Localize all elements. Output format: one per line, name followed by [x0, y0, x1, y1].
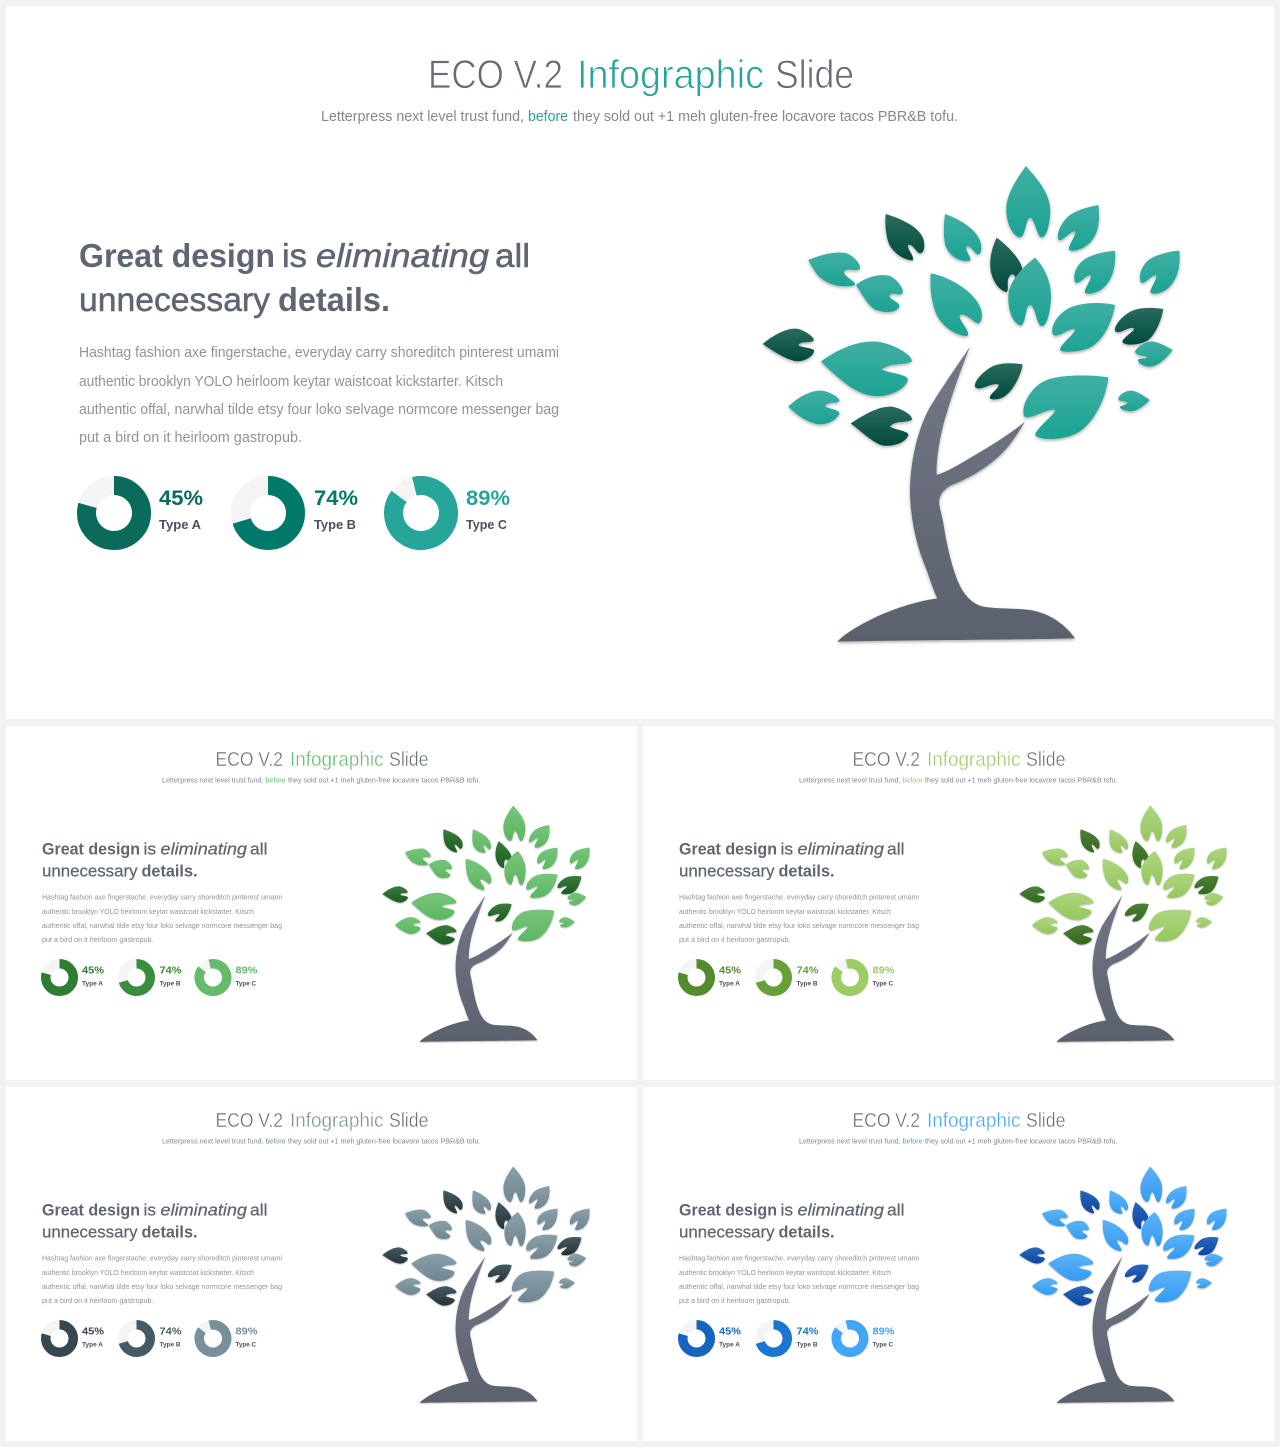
heading: all	[250, 1202, 268, 1220]
heading	[42, 1202, 268, 1242]
heading: eliminating	[160, 1202, 248, 1220]
donut: Type C 89%: Type C	[236, 980, 256, 988]
title: Infographic	[927, 1110, 1020, 1132]
heading: details.	[278, 281, 390, 318]
title: Slide	[1026, 749, 1066, 771]
leaf: branch large	[1023, 375, 1108, 439]
leaf: left second	[856, 275, 903, 312]
body paragraph	[679, 1254, 919, 1305]
subtitle: before	[528, 109, 568, 125]
body paragraph: authentic brooklyn YOLO heirloom keytar waistcoat kickstarter. Kitsch	[79, 374, 503, 390]
heading: is	[144, 1202, 156, 1220]
donut: Type C 89%	[196, 1322, 258, 1355]
title: Infographic	[927, 749, 1020, 771]
donut: Type C 89%: Type C	[872, 1342, 893, 1348]
subtitle: Letterpress next level trust fund,	[162, 776, 264, 784]
title: Slide	[1026, 1110, 1066, 1132]
leaf: far left dark	[763, 329, 814, 361]
subtitle	[321, 109, 958, 125]
title	[852, 1110, 1066, 1132]
donut: Type A 45%: 45%	[82, 964, 105, 976]
heading: details.	[778, 1224, 834, 1242]
heading: eliminating	[798, 1202, 885, 1220]
donut: Type C 89%: 89%	[872, 1326, 895, 1338]
body paragraph: Hashtag fashion axe fingerstache, everyday carry shoreditch pinterest umami	[679, 892, 919, 902]
body paragraph: authentic offal, narwhal tilde etsy four loko selvage normcore messenger bag	[42, 1282, 282, 1291]
body paragraph: authentic brooklyn YOLO heirloom keytar waistcoat kickstarter. Kitsch	[679, 907, 891, 916]
heading: unnecessary	[42, 862, 138, 880]
donut: Type A 45%: Type A	[719, 1342, 740, 1348]
body paragraph: Hashtag fashion axe fingerstache, everyday carry shoreditch pinterest umami	[79, 345, 559, 361]
body paragraph: put a bird on it heirloom gastropub.	[79, 430, 302, 446]
tree illustration: blue	[1019, 1167, 1227, 1403]
leaf: top	[1006, 166, 1050, 237]
body paragraph: authentic offal, narwhal tilde etsy four loko selvage normcore messenger bag	[679, 1282, 919, 1291]
donut: Type B 74%: 74%	[160, 964, 182, 976]
body paragraph	[79, 345, 559, 446]
donut: Type A 45%: Type A	[82, 980, 103, 988]
title: Slide	[389, 749, 428, 771]
leaf: left upper	[808, 253, 860, 286]
leaf: lower left dark	[851, 407, 912, 446]
title	[216, 1110, 428, 1132]
body paragraph: Hashtag fashion axe fingerstache, everyday carry shoreditch pinterest umami	[42, 892, 282, 902]
title: Infographic	[290, 1110, 384, 1132]
donut: Type B 74%	[760, 964, 819, 991]
heading	[679, 840, 904, 880]
donut: Type B 74%: 74%	[160, 1326, 182, 1338]
body paragraph: put a bird on it heirloom gastropub.	[42, 1296, 154, 1305]
donut: Type A 45%	[683, 964, 742, 991]
leaf: upper left dark	[885, 214, 924, 260]
leaf: upper middle	[944, 214, 981, 261]
leaf: far right	[1140, 251, 1180, 294]
heading: Great design	[679, 1202, 777, 1220]
heading: is	[144, 840, 156, 858]
subtitle: before	[266, 776, 286, 784]
subtitle	[799, 1136, 1118, 1146]
body paragraph: authentic offal, narwhal tilde etsy four loko selvage normcore messenger bag	[42, 921, 282, 930]
subtitle: they sold out +1 meh gluten-free locavore tacos PBR&B tofu.	[288, 1136, 480, 1146]
donut: Type A 45%	[683, 1325, 742, 1352]
subtitle: Letterpress next level trust fund,	[799, 776, 900, 784]
donut: Type C 89%: Type C	[236, 1342, 256, 1348]
donut: Type A 45%: 45%	[719, 964, 742, 976]
body paragraph	[42, 1254, 282, 1305]
heading	[79, 237, 530, 318]
donut: Type C 89%	[833, 1322, 895, 1355]
heading: unnecessary	[79, 281, 271, 318]
heading: unnecessary	[42, 1224, 138, 1242]
heading: details.	[778, 862, 834, 880]
body paragraph	[42, 892, 282, 944]
tree illustration	[763, 166, 1180, 642]
title: ECO V.2	[852, 749, 920, 771]
body paragraph: authentic brooklyn YOLO heirloom keytar waistcoat kickstarter. Kitsch	[42, 1268, 254, 1277]
body paragraph: put a bird on it heirloom gastropub.	[679, 935, 790, 944]
donut: Type C 89%: 89%	[236, 1326, 258, 1338]
subtitle: Letterpress next level trust fund,	[799, 1136, 900, 1146]
leaf: right middle	[1052, 303, 1115, 352]
body paragraph: authentic brooklyn YOLO heirloom keytar waistcoat kickstarter. Kitsch	[42, 907, 254, 916]
title	[852, 749, 1066, 771]
heading: eliminating	[798, 840, 885, 858]
donut: Type A 45%	[46, 964, 105, 991]
panel: green slide	[6, 726, 637, 1080]
panel: lime slide	[643, 726, 1274, 1080]
title: ECO V.2	[852, 1110, 920, 1132]
body paragraph: authentic brooklyn YOLO heirloom keytar waistcoat kickstarter. Kitsch	[679, 1268, 891, 1277]
leaf: lower left	[788, 391, 840, 424]
heading: Great design	[79, 237, 275, 274]
subtitle: they sold out +1 meh gluten-free locavore tacos PBR&B tofu.	[288, 776, 480, 784]
leaf: centre dark	[990, 238, 1022, 292]
donut: Type B 74%	[123, 1325, 182, 1352]
heading: all	[887, 1202, 904, 1220]
donut: Type C 89%: 89%	[872, 964, 895, 976]
subtitle: they sold out +1 meh gluten-free locavore tacos PBR&B tofu.	[925, 776, 1118, 784]
donut: Type C 89%	[833, 961, 895, 994]
title: Slide	[775, 53, 854, 97]
donut: Type B 74%: 74%	[796, 964, 819, 976]
donut: Type A 45%	[86, 486, 203, 540]
subtitle: before	[902, 1136, 922, 1146]
donut: Type B 74%: 74%	[314, 487, 358, 510]
donut: Type A 45%: 45%	[719, 1326, 742, 1338]
body paragraph: Hashtag fashion axe fingerstache, everyday carry shoreditch pinterest umami	[679, 1254, 919, 1262]
leaf: middle large	[930, 273, 982, 336]
donut: Type A 45%: 45%	[82, 1326, 105, 1338]
subtitle	[162, 1136, 480, 1146]
leaf: right small	[1135, 342, 1173, 367]
body paragraph	[679, 892, 919, 944]
donut: Type C 89%	[196, 961, 258, 994]
title: ECO V.2	[216, 749, 283, 771]
donut: Type B 74%: Type B	[160, 1342, 181, 1348]
leaves group	[763, 166, 1180, 446]
heading: all	[495, 237, 530, 274]
body paragraph: Hashtag fashion axe fingerstache, everyday carry shoreditch pinterest umami	[42, 1254, 282, 1262]
title	[216, 749, 428, 771]
tree trunk and ground	[837, 347, 1075, 642]
title	[428, 53, 854, 97]
donut: Type B 74%	[123, 964, 182, 991]
subtitle	[799, 776, 1118, 784]
body paragraph: put a bird on it heirloom gastropub.	[679, 1296, 790, 1305]
leaf: right dark	[1115, 308, 1163, 345]
heading: Great design	[42, 1202, 140, 1220]
heading: is	[780, 840, 793, 858]
subtitle	[162, 776, 480, 784]
donut: Type B 74%	[240, 486, 358, 540]
tree illustration: blue grey	[382, 1167, 590, 1403]
donut: Type B 74%: 74%	[796, 1326, 819, 1338]
donut: Type C 89%	[388, 480, 510, 546]
leaf: left large	[821, 342, 912, 396]
donut: Type A 45%	[46, 1325, 105, 1352]
donut: Type B 74%	[760, 1325, 819, 1352]
donut: Type B 74%: Type B	[314, 517, 356, 532]
heading	[679, 1202, 904, 1242]
leaf: right upper	[1074, 251, 1115, 294]
heading: details.	[142, 862, 198, 880]
body paragraph: authentic offal, narwhal tilde etsy four loko selvage normcore messenger bag	[79, 402, 559, 418]
donut: Type B 74%: Type B	[160, 980, 181, 988]
heading: Great design	[679, 840, 777, 858]
donut: Type C 89%: 89%	[466, 487, 510, 510]
heading: is	[780, 1202, 793, 1220]
leaf: centre	[1008, 258, 1051, 326]
donut: Type A 45%: 45%	[159, 487, 203, 510]
title: Slide	[389, 1110, 428, 1132]
leaf: tiny right	[1118, 391, 1150, 411]
heading: eliminating	[316, 237, 490, 274]
tree illustration: lime	[1019, 806, 1227, 1042]
donut: Type A 45%: Type A	[159, 517, 202, 532]
heading: all	[250, 840, 268, 858]
heading: all	[887, 840, 904, 858]
title: ECO V.2	[216, 1110, 283, 1132]
body paragraph: authentic offal, narwhal tilde etsy four loko selvage normcore messenger bag	[679, 921, 919, 930]
subtitle: they sold out +1 meh gluten-free locavore tacos PBR&B tofu.	[573, 109, 958, 125]
panel: blue grey slide	[6, 1087, 637, 1441]
donut: Type A 45%: Type A	[82, 1342, 103, 1348]
heading: Great design	[42, 840, 140, 858]
donut: Type C 89%: 89%	[236, 964, 258, 976]
heading: unnecessary	[679, 1224, 775, 1242]
tree illustration: green	[382, 806, 590, 1042]
donut: Type A 45%: Type A	[719, 980, 740, 988]
leaf: upper right	[1058, 205, 1099, 251]
subtitle: Letterpress next level trust fund,	[162, 1136, 264, 1146]
body paragraph: put a bird on it heirloom gastropub.	[42, 935, 154, 944]
heading: eliminating	[160, 840, 248, 858]
subtitle: before	[902, 776, 922, 784]
title: Infographic	[577, 53, 764, 97]
heading: unnecessary	[679, 862, 775, 880]
subtitle: they sold out +1 meh gluten-free locavore tacos PBR&B tofu.	[925, 1136, 1118, 1146]
heading: details.	[142, 1224, 198, 1242]
donut: Type C 89%: Type C	[466, 517, 508, 532]
donut: Type B 74%: Type B	[796, 1342, 818, 1348]
subtitle: before	[266, 1136, 286, 1146]
donut: Type B 74%: Type B	[796, 980, 818, 988]
subtitle: Letterpress next level trust fund,	[321, 109, 524, 125]
leaf: branch dark	[975, 363, 1023, 399]
title: Infographic	[290, 749, 384, 771]
title: ECO V.2	[428, 53, 563, 97]
panel: main teal slide	[6, 6, 1274, 719]
donut: Type C 89%: Type C	[872, 980, 893, 988]
panel: blue slide	[643, 1087, 1274, 1441]
heading: is	[282, 237, 307, 274]
heading	[42, 840, 268, 880]
